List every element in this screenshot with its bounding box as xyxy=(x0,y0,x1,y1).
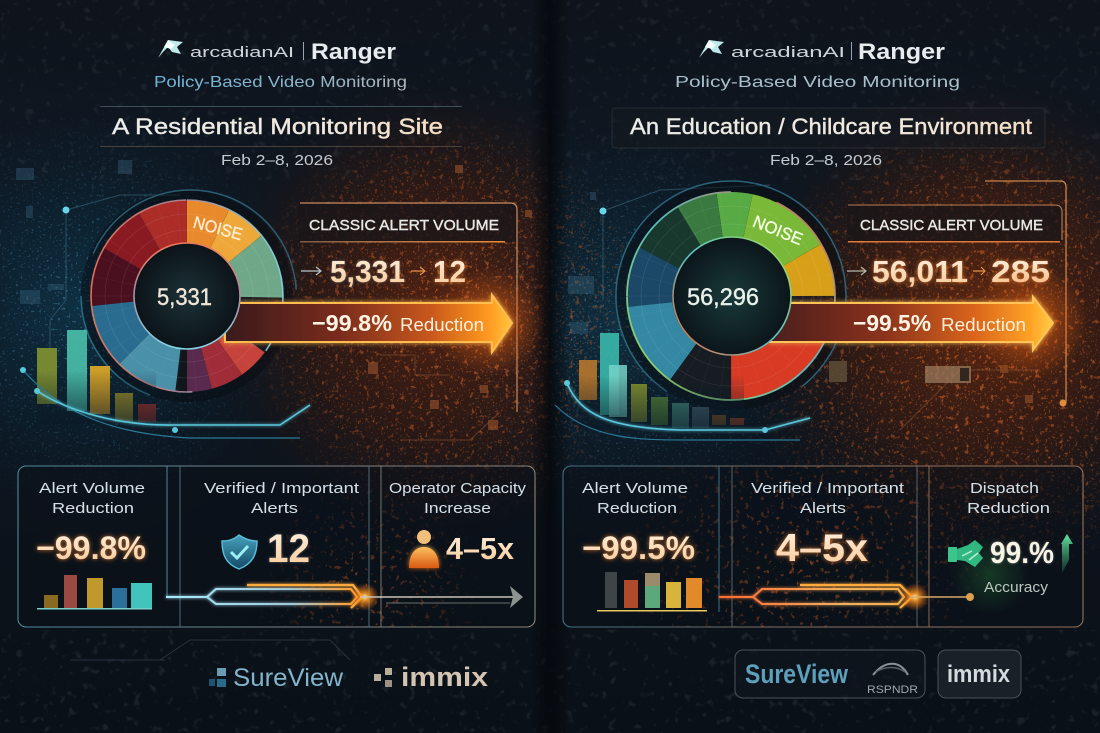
classic alert volume panel xyxy=(298,203,517,412)
heading: CLASSIC ALERT VOLUME xyxy=(860,217,1043,234)
card: operator capacity: Operator Capacity xyxy=(389,480,527,497)
logo: immix xyxy=(374,662,488,692)
logo box: SureView and RSPNDR xyxy=(735,650,925,698)
value xyxy=(853,310,1026,336)
card: dispatch reduction: Reduction xyxy=(967,500,1050,517)
donut gauge: 5,331 xyxy=(81,176,297,401)
card: alert volume reduction: Alert Volume xyxy=(582,480,688,497)
card: verified alerts xyxy=(180,466,369,627)
title: An Education / Childcare Environment xyxy=(630,114,1032,139)
logo: arcadianAI: Ranger xyxy=(858,39,946,64)
KPI cards: education xyxy=(563,466,1083,627)
panel: education / childcare xyxy=(555,39,1088,698)
circuit curves xyxy=(20,206,310,438)
KPI cards: residential xyxy=(18,466,535,627)
arrows and numbers: 5,331 xyxy=(330,254,405,289)
value: Reduction xyxy=(941,315,1026,335)
card: alert volume reduction: −99.5% xyxy=(582,530,695,566)
mini bars xyxy=(597,572,707,612)
donut centre: total: 56,296 xyxy=(687,284,759,311)
value: −99.8% xyxy=(312,310,392,336)
icon: up arrow xyxy=(1061,534,1073,573)
header: residential xyxy=(100,39,462,169)
card: verified alerts xyxy=(732,466,917,627)
card: verified alerts: Verified / Important xyxy=(204,480,360,497)
arrows and numbers xyxy=(847,254,1050,289)
logo: arcadianAI xyxy=(699,39,946,64)
arrow: bottom progress xyxy=(719,583,974,611)
logo: arcadianAI: arcadianAI xyxy=(731,44,845,61)
heading: CLASSIC ALERT VOLUME xyxy=(309,217,499,234)
logo box: SureView and RSPNDR: SureView xyxy=(745,659,849,689)
logo: arcadianAI xyxy=(158,39,396,64)
label: NOISE: NOISE xyxy=(191,213,244,244)
bar chart: left decorative bars xyxy=(579,333,744,429)
value: Reduction xyxy=(400,315,484,335)
label: NOISE: NOISE xyxy=(750,212,805,249)
icon: shield check xyxy=(222,535,257,569)
date: Feb 2–8, 2026 xyxy=(770,153,882,169)
card: verified alerts: 4–5x xyxy=(776,527,868,570)
classic alert volume panel xyxy=(847,181,1066,406)
card: dispatch reduction xyxy=(929,466,1073,627)
partner logos: residential xyxy=(209,662,488,692)
icon: handshake xyxy=(948,540,983,567)
card: alert volume reduction xyxy=(36,466,167,610)
sub-label: Accuracy xyxy=(984,580,1049,596)
logo: arcadianAI: arcadianAI xyxy=(190,44,294,61)
donut centre: total: 5,331 xyxy=(157,284,212,311)
arrow: bottom progress xyxy=(166,583,523,611)
bar chart: left decorative bars xyxy=(37,330,156,424)
panel: residential site xyxy=(18,39,545,692)
card: operator capacity: Increase xyxy=(424,500,491,517)
subtitle: Policy-Based Video Monitoring xyxy=(675,74,960,91)
value: −99.5% xyxy=(853,310,931,336)
arrow: reduction xyxy=(770,264,1088,380)
logo box: immix xyxy=(938,650,1021,698)
donut gauge: 56,296 xyxy=(595,160,867,432)
small panel widget xyxy=(829,361,971,383)
card: verified alerts: 12 xyxy=(267,527,310,571)
logo: arcadianAI: Ranger xyxy=(311,39,396,64)
card: operator capacity xyxy=(381,466,527,627)
donut centre: total xyxy=(673,237,791,355)
header: education xyxy=(612,39,1045,169)
card: dispatch reduction: Dispatch xyxy=(970,480,1039,497)
partner logos: education xyxy=(735,650,1021,698)
logo box: immix: immix xyxy=(947,661,1011,688)
icon: person xyxy=(409,530,439,568)
card: alert volume reduction: −99.8% xyxy=(36,530,146,566)
arrows and numbers: 285 xyxy=(991,254,1050,289)
card: verified alerts: Verified / Important xyxy=(751,480,905,497)
card: operator capacity: 4–5x xyxy=(446,531,515,566)
value xyxy=(312,310,484,336)
card: alert volume reduction: Reduction xyxy=(597,500,677,517)
arrows and numbers: 12 xyxy=(433,254,466,289)
card: dispatch reduction: 99.% xyxy=(990,535,1054,570)
donut centre: total xyxy=(134,243,240,349)
title: A Residential Monitoring Site xyxy=(112,114,443,139)
subtitle: Policy-Based Video Monitoring xyxy=(154,74,407,91)
card: verified alerts: Alerts xyxy=(800,500,846,517)
arrows and numbers xyxy=(301,254,466,289)
card: alert volume reduction: Alert Volume xyxy=(39,480,145,497)
circuit traces xyxy=(50,185,1040,660)
arrow: reduction xyxy=(225,267,545,377)
date: Feb 2–8, 2026 xyxy=(221,153,333,169)
mini bars xyxy=(37,575,152,610)
logo box: SureView and RSPNDR: RSPNDR xyxy=(867,684,918,696)
card: alert volume reduction: Reduction xyxy=(52,500,134,517)
card: verified alerts: Alerts xyxy=(251,500,298,517)
circuit curves xyxy=(555,208,810,440)
card: alert volume reduction xyxy=(582,466,719,612)
logo: SureView: SureView xyxy=(233,664,344,692)
arrows and numbers: 56,011 xyxy=(872,254,968,289)
logo: immix: immix xyxy=(401,662,488,692)
